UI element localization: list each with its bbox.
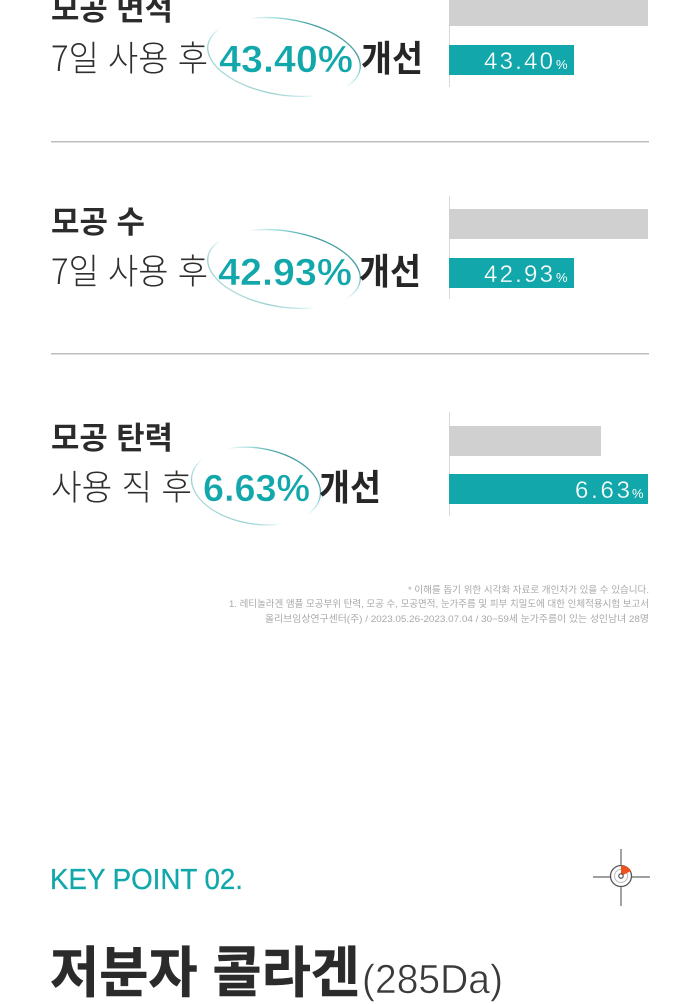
highlight ellipse: 6.63% bbox=[186, 438, 326, 534]
panel: pore count bbox=[51, 196, 648, 319]
text: 42.93% improvement after 7 days: 7일 사용 후 bbox=[51, 244, 208, 295]
highlight ellipse: 42.93% bbox=[202, 219, 366, 319]
text: 6.63% improvement immediately after use: 개선 bbox=[319, 467, 381, 508]
bar chart: pore elasticity bbox=[449, 412, 648, 516]
bar chart: pore count: % bbox=[556, 270, 568, 285]
bar chart: pore area: 43.40 bbox=[484, 48, 553, 75]
footnote: 1. 레티놀라겐 앰플 모공부위 탄력, 모공 수, 모공면적, 눈가주름 및 피부 치밀도에 대한 인체적용시험 보고서 bbox=[229, 598, 649, 610]
footnote: 올리브임상연구센터(주) / 2023.05.26-2023.07.04 / 30~59세 눈가주름이 있는 성인남녀 28명 bbox=[265, 613, 649, 625]
footnote bbox=[229, 584, 649, 625]
text: 43.40% improvement after 7 days: 개선 bbox=[361, 38, 423, 79]
text: 43.40% improvement after 7 days: 7일 사용 후 bbox=[51, 31, 208, 82]
bar chart: pore elasticity: 6.63 bbox=[575, 477, 630, 504]
heading: pore count: 모공 수 bbox=[51, 205, 145, 240]
heading: pore elasticity: 모공 탄력 bbox=[51, 421, 173, 456]
text: 43.40% improvement after 7 days bbox=[51, 31, 423, 82]
bar chart: pore area bbox=[449, 0, 648, 87]
main title: 저분자 콜라겐 bbox=[50, 942, 360, 1004]
bar chart: pore count bbox=[449, 196, 648, 299]
text: 6.63% improvement immediately after use: 6.63% bbox=[203, 468, 310, 510]
text: 42.93% improvement after 7 days: 42.93% bbox=[218, 252, 352, 294]
text: 42.93% improvement after 7 days bbox=[51, 244, 421, 295]
text: 43.40% improvement after 7 days: 43.40% bbox=[219, 39, 353, 81]
text: 42.93% improvement after 7 days: 개선 bbox=[359, 251, 421, 292]
text: 6.63% improvement immediately after use bbox=[51, 460, 381, 511]
panel: pore area bbox=[51, 0, 648, 107]
footnote: * 이해를 돕기 위한 시각화 자료로 개인차가 있을 수 있습니다. bbox=[408, 584, 649, 596]
text: 6.63% improvement immediately after use: 사용 직 후 bbox=[51, 460, 192, 511]
panel: pore elasticity bbox=[51, 412, 648, 534]
main title: (285Da) bbox=[362, 956, 503, 1002]
highlight ellipse: 43.40% bbox=[202, 7, 366, 107]
bar chart: pore area: % bbox=[556, 57, 568, 72]
bar chart: pore elasticity: % bbox=[632, 486, 644, 501]
icon: target crosshair bbox=[593, 849, 650, 906]
key point label: KEY POINT 02. bbox=[50, 864, 243, 896]
bar chart: pore count: 42.93 bbox=[484, 261, 553, 288]
